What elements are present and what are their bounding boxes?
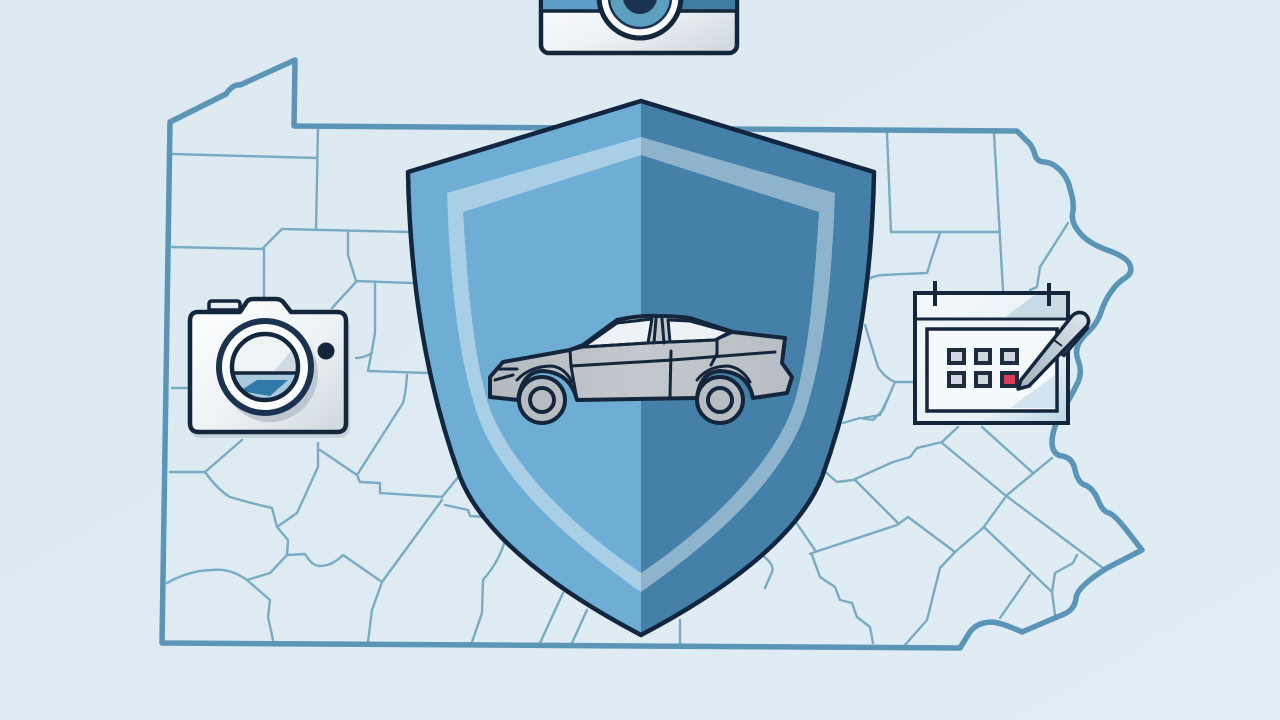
- camera: flash dot: [318, 342, 334, 360]
- shield: left half: [408, 101, 641, 635]
- camera: body: [541, 0, 737, 53]
- car: front wheel: [519, 377, 565, 423]
- camera: blue band right: [640, 0, 735, 10]
- calendar: header reflection: [1005, 295, 1066, 317]
- calendar: highlighted day: [1002, 373, 1017, 386]
- camera: lens inner: [234, 336, 296, 398]
- calendar: inner page: [927, 329, 1057, 411]
- illustration: Pennsylvania map with shield, car, cameras and calendar: [159, 0, 1145, 651]
- shield: inner band right: [641, 137, 835, 592]
- camera: body: [190, 299, 346, 432]
- calendar: page reflection: [1010, 375, 1055, 408]
- map: county lines: [167, 128, 1103, 645]
- icon: camera top: [541, 0, 737, 53]
- calendar: pen: [1018, 312, 1089, 389]
- calendar: day squares: [949, 350, 1017, 386]
- car: rear wheel: [697, 377, 743, 423]
- camera: lens: [599, 0, 681, 38]
- icon: calendar with pen: [915, 281, 1089, 423]
- shield: [408, 101, 874, 635]
- shield: right half: [641, 101, 874, 635]
- calendar: binding rings: [935, 281, 1049, 306]
- icon: car: [490, 316, 792, 423]
- map: Pennsylvania state outline: [162, 60, 1142, 648]
- car: body: [490, 316, 792, 400]
- camera: body shadow: [190, 316, 350, 438]
- calendar: frame: [915, 293, 1068, 423]
- calendar: header rule: [915, 318, 1068, 320]
- camera: lens iris outline: [232, 334, 298, 400]
- car: body lines: [495, 319, 775, 400]
- camera: viewfinder: [209, 301, 240, 310]
- car: windows: [583, 319, 652, 347]
- icon: camera left: [190, 299, 350, 438]
- camera: lens outer ring: [219, 321, 311, 413]
- camera: lens shadow: [222, 326, 318, 422]
- shield: outline: [408, 101, 874, 635]
- camera: blue band left: [543, 0, 640, 10]
- shield: inner band left: [447, 137, 641, 592]
